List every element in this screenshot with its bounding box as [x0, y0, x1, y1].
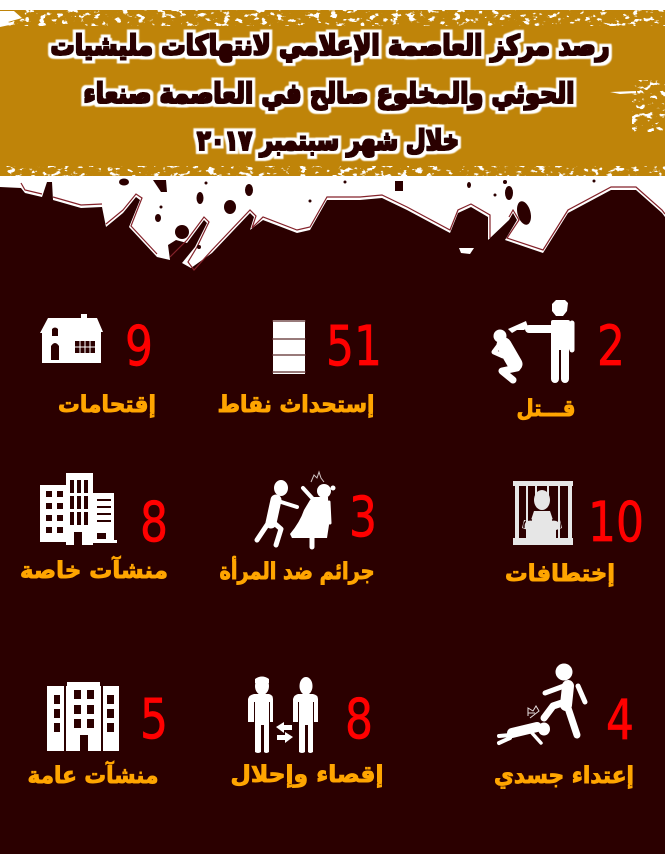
- stat: abductions: [505, 481, 644, 587]
- label: إعتداء جسدي: [494, 763, 634, 789]
- stat: killing: [494, 300, 625, 422]
- stat: raids: [40, 314, 156, 418]
- icon: public building: [47, 682, 119, 751]
- number: 5: [140, 687, 168, 751]
- label: إستحداث نقاط: [218, 392, 374, 418]
- title: خلال شهر سبتمبر ٢٠١٧: [197, 124, 459, 157]
- icon: house: [40, 314, 103, 363]
- icon: impact stars: [528, 706, 539, 718]
- label: منشآت عامة: [28, 760, 158, 789]
- label: إقتحامات: [58, 392, 156, 418]
- title: الحوثي والمخلوع صالح في العاصمة صنعاء: [84, 77, 574, 110]
- title: [50, 29, 610, 157]
- number: 10: [588, 490, 644, 554]
- icon: execution: [494, 300, 572, 380]
- icon: office buildings: [40, 473, 117, 545]
- stat: exclusion and replacement: [230, 676, 384, 788]
- number: 9: [125, 314, 153, 378]
- label: إختطافات: [505, 561, 615, 587]
- icon: impact star: [311, 472, 324, 482]
- number: 8: [140, 490, 168, 554]
- number: 51: [326, 314, 382, 378]
- blood drops: [119, 178, 596, 249]
- number: 4: [606, 688, 634, 752]
- icon: prisoner behind bars: [513, 481, 573, 545]
- header banner: [0, 0, 665, 285]
- label: إقصاء وإحلال: [230, 762, 384, 788]
- stat: crimes against women: [220, 472, 377, 585]
- number: 3: [349, 485, 377, 549]
- icon: assault on woman: [257, 480, 336, 547]
- stat: public facilities: [28, 682, 168, 789]
- stat: private facilities: [20, 473, 168, 584]
- number: 2: [597, 314, 625, 378]
- icon: kicking man: [499, 664, 585, 743]
- icon: barrel: [272, 320, 306, 374]
- stat: physical assault: [494, 664, 634, 789]
- number: 8: [345, 687, 373, 751]
- stat: oil barrels points: [218, 314, 382, 418]
- label: جرائم ضد المرأة: [220, 555, 374, 585]
- blood drip edge: [0, 182, 665, 300]
- icon: two men swapping: [248, 676, 318, 753]
- label: قـــتل: [516, 396, 576, 422]
- label: منشآت خاصة: [20, 555, 168, 584]
